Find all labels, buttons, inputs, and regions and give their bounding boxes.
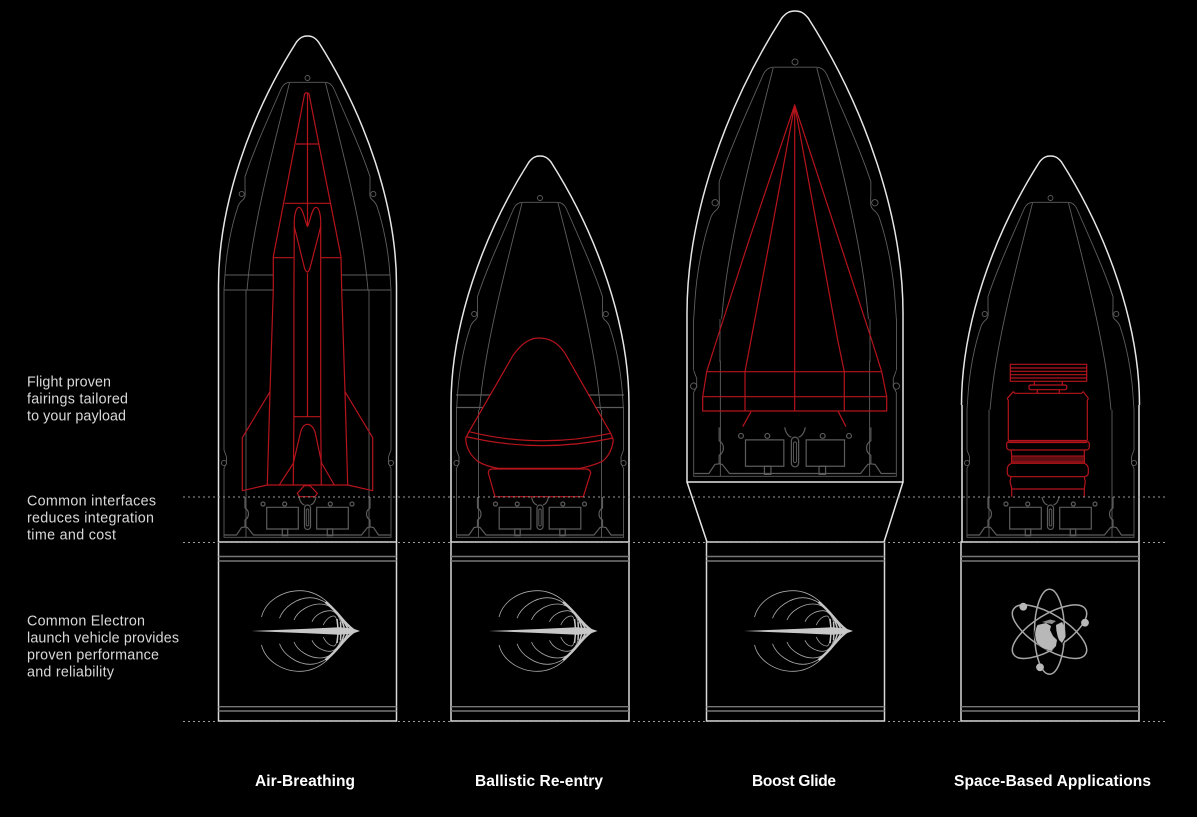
electron body <box>218 542 396 721</box>
rocket: air-breathing fairing <box>218 36 396 721</box>
text: launch vehicle: launch vehicle provides <box>27 630 179 646</box>
logo: hypersonic <box>744 591 853 671</box>
fairing structure <box>687 11 903 542</box>
fairing structure <box>218 36 396 542</box>
text: interfaces: time and cost <box>27 528 116 544</box>
text: fairings: fairings tailored <box>27 392 128 408</box>
text: interfaces <box>27 494 156 544</box>
text: interfaces: Common interfaces <box>27 494 156 510</box>
payload: re-entry capsule <box>466 338 613 497</box>
payload: glide vehicle <box>703 105 887 427</box>
text: launch vehicle: Common Electron <box>27 614 145 630</box>
electron body <box>451 542 629 721</box>
payload: satellite <box>1007 364 1089 497</box>
fairing structure <box>962 156 1140 542</box>
column titles: Air-Breathing <box>255 773 355 790</box>
column titles: Space-Based Applications <box>954 773 1151 790</box>
logo: hypersonic <box>488 591 598 671</box>
text: launch vehicle: and reliability <box>27 664 115 680</box>
column titles <box>255 773 1151 790</box>
logo: hypersonic <box>251 591 360 671</box>
fairing structure <box>451 156 629 542</box>
electron body <box>961 542 1139 721</box>
logo: atom and globe <box>1004 589 1095 674</box>
text: launch vehicle: proven performance <box>27 648 159 664</box>
rocket: space-based fairing <box>961 156 1140 721</box>
text: launch vehicle <box>27 614 179 680</box>
globe <box>1034 619 1066 650</box>
electrons <box>1019 603 1089 671</box>
text: fairings: Flight proven <box>27 374 111 390</box>
column titles: Ballistic Re-entry <box>475 773 603 790</box>
column titles: Boost Glide <box>752 773 836 790</box>
electron body <box>706 542 884 721</box>
rocket: ballistic re-entry fairing <box>451 156 629 721</box>
text: fairings <box>27 374 128 424</box>
rocket: boost glide fairing <box>687 11 903 721</box>
text: fairings: to your payload <box>27 408 126 424</box>
dotted guide lines <box>183 497 1167 722</box>
atom orbits <box>1004 589 1095 674</box>
text: interfaces: reduces integration <box>27 510 154 526</box>
payload: air-breathing vehicle <box>242 93 373 497</box>
